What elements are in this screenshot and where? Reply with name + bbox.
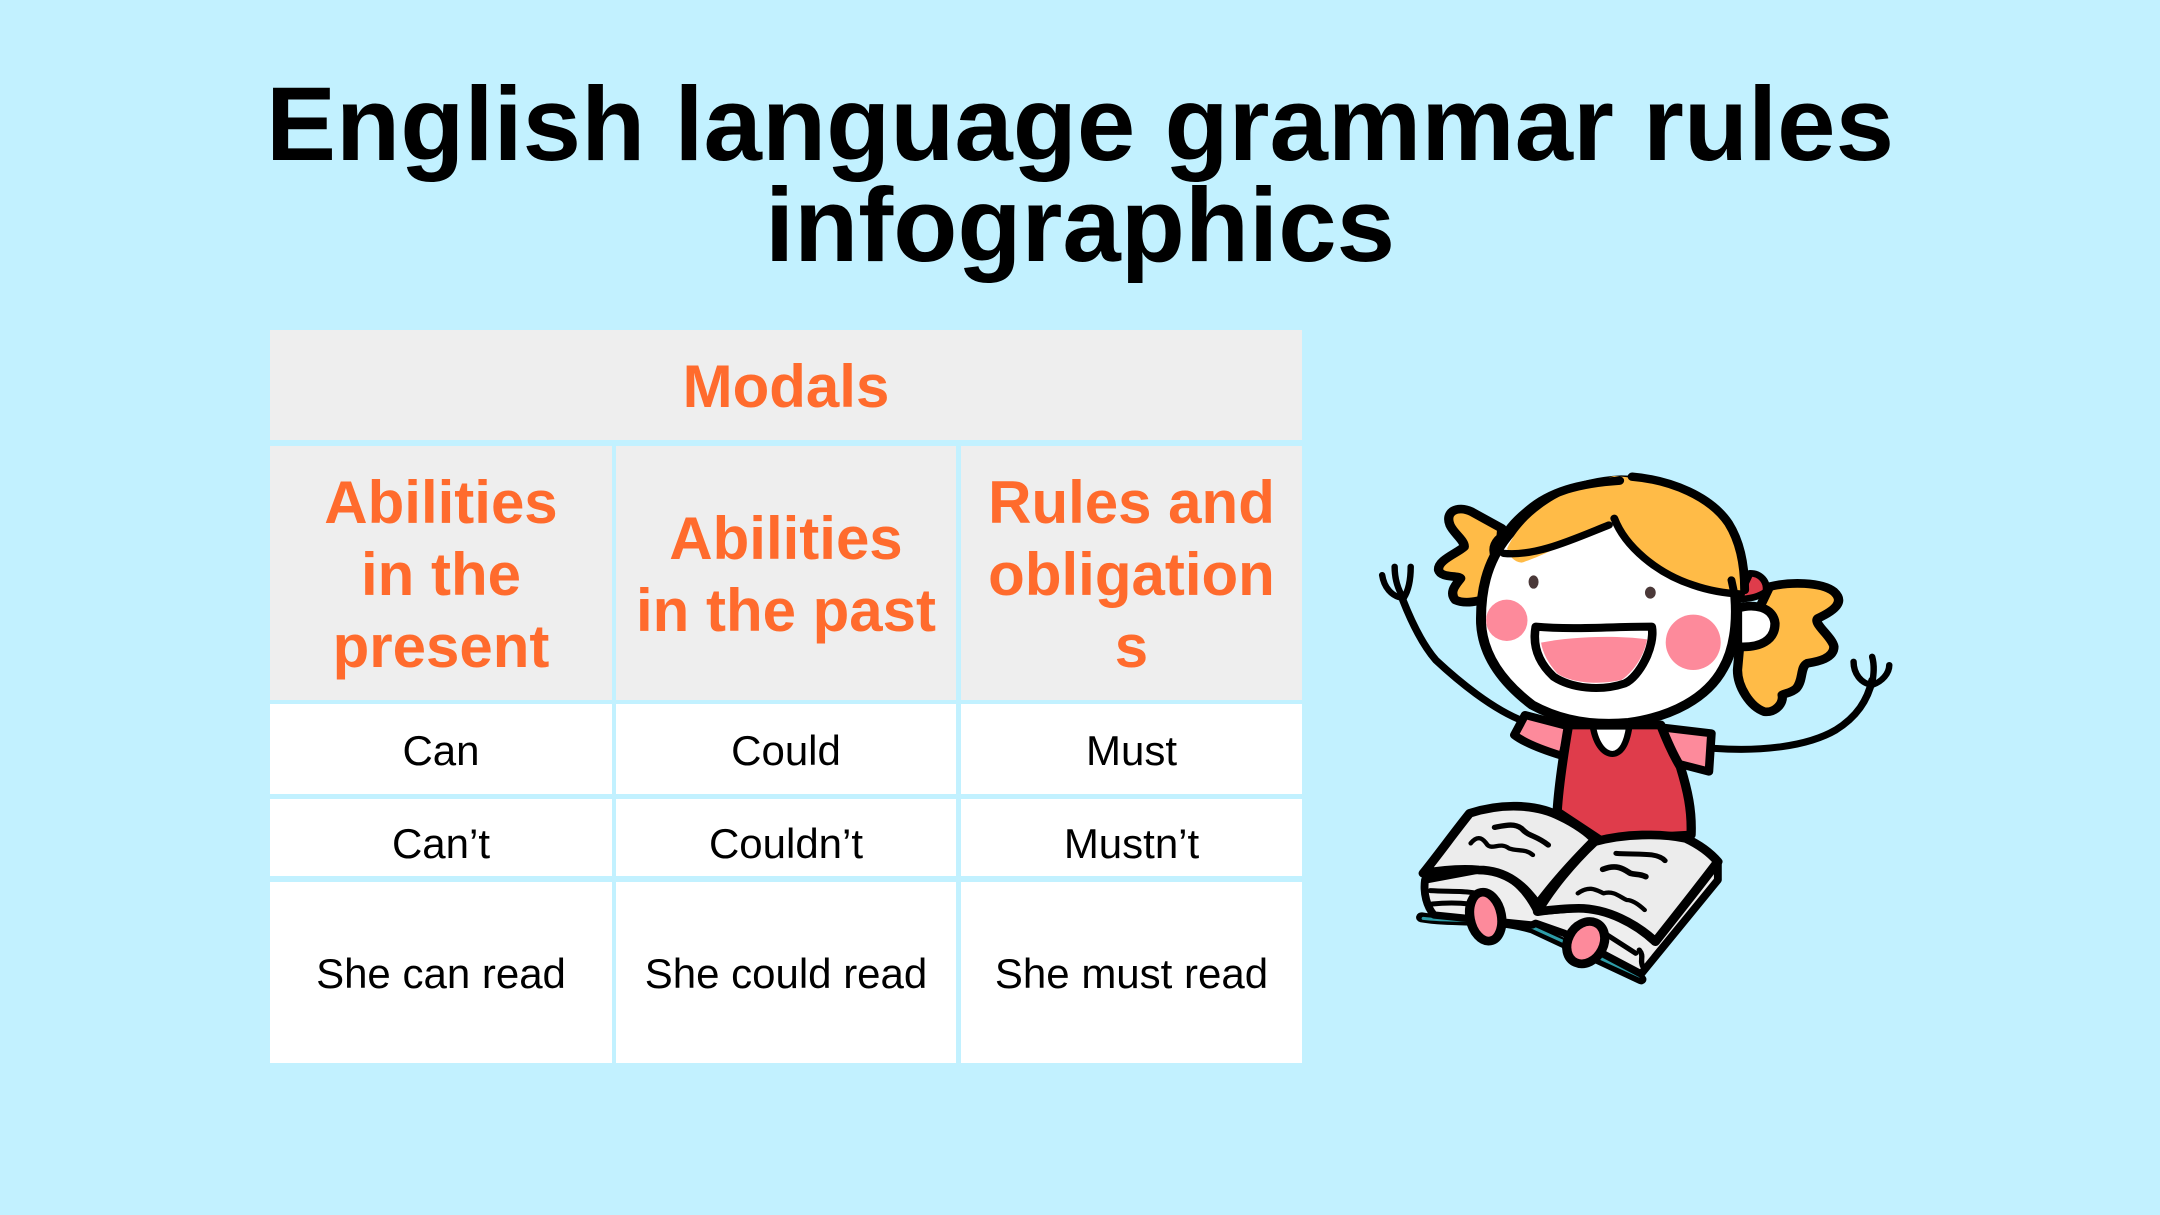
dress [1557, 725, 1691, 840]
column heading: abilities in the past: in the past [636, 577, 936, 644]
head [1481, 480, 1736, 724]
cell: can't [270, 799, 612, 876]
cell: she must read: She must read [995, 950, 1268, 997]
cell: she could read: She could read [645, 950, 927, 997]
cell: can [270, 704, 612, 794]
cell: mustn't: Mustn’t [1064, 820, 1199, 866]
hair [1500, 476, 1745, 597]
right ponytail [1737, 583, 1839, 712]
table heading: modals [270, 330, 1302, 440]
cell: she could read [616, 882, 956, 1063]
left arm [1382, 567, 1525, 722]
right ear [1737, 606, 1775, 647]
page scribbles [1471, 825, 1665, 910]
cell: she can read [270, 882, 612, 1063]
left hair band [1493, 533, 1506, 557]
cell: can: Can [402, 726, 480, 774]
column heading: abilities in the present: present [333, 613, 549, 680]
title: infographics [765, 167, 1395, 284]
cell: mustn't [961, 799, 1302, 876]
cell: must [961, 704, 1302, 794]
page edges [1430, 891, 1643, 967]
column heading: rules and obligations: s [1115, 613, 1148, 680]
right hair band [1737, 573, 1766, 600]
book [1421, 806, 1718, 979]
left sleeve [1514, 715, 1570, 756]
right foot [1560, 916, 1612, 970]
book cover [1421, 917, 1641, 979]
cell: could [616, 704, 956, 794]
lower pages [1425, 862, 1718, 974]
right sleeve [1661, 727, 1711, 772]
table: modals [270, 330, 1302, 1063]
cell: couldn't [616, 799, 956, 876]
dress collar [1593, 727, 1629, 754]
cell: she must read [961, 882, 1302, 1063]
cell: couldn't: Couldn’t [709, 820, 863, 866]
column heading: rules and obligations: Rules and [988, 469, 1275, 536]
cell: can't: Can’t [392, 820, 490, 866]
eyes [1529, 575, 1656, 599]
cell: must: Must [1086, 726, 1177, 774]
title: English language grammar rules [266, 66, 1894, 183]
left ponytail [1439, 509, 1502, 602]
column heading: abilities in the present: in the [361, 541, 521, 608]
right page [1537, 835, 1718, 942]
column heading: abilities in the past: Abilities [669, 505, 903, 572]
left page [1423, 806, 1595, 905]
left foot [1466, 890, 1506, 944]
mouth [1535, 627, 1652, 688]
column heading: abilities in the present: Abilities [324, 469, 558, 536]
cell: she can read: She can read [316, 950, 566, 997]
title [266, 66, 1894, 284]
right arm [1714, 657, 1889, 749]
column heading: rules and obligations: obligation [988, 541, 1275, 608]
illustration: girl reading a book [1382, 476, 1889, 979]
column heading: rules and obligations [961, 446, 1302, 700]
cheeks [1486, 600, 1721, 670]
column heading: abilities in the present [270, 446, 612, 700]
cell: could: Could [731, 726, 841, 774]
column heading: abilities in the past [616, 446, 956, 700]
table heading: modals: Modals [683, 353, 889, 420]
